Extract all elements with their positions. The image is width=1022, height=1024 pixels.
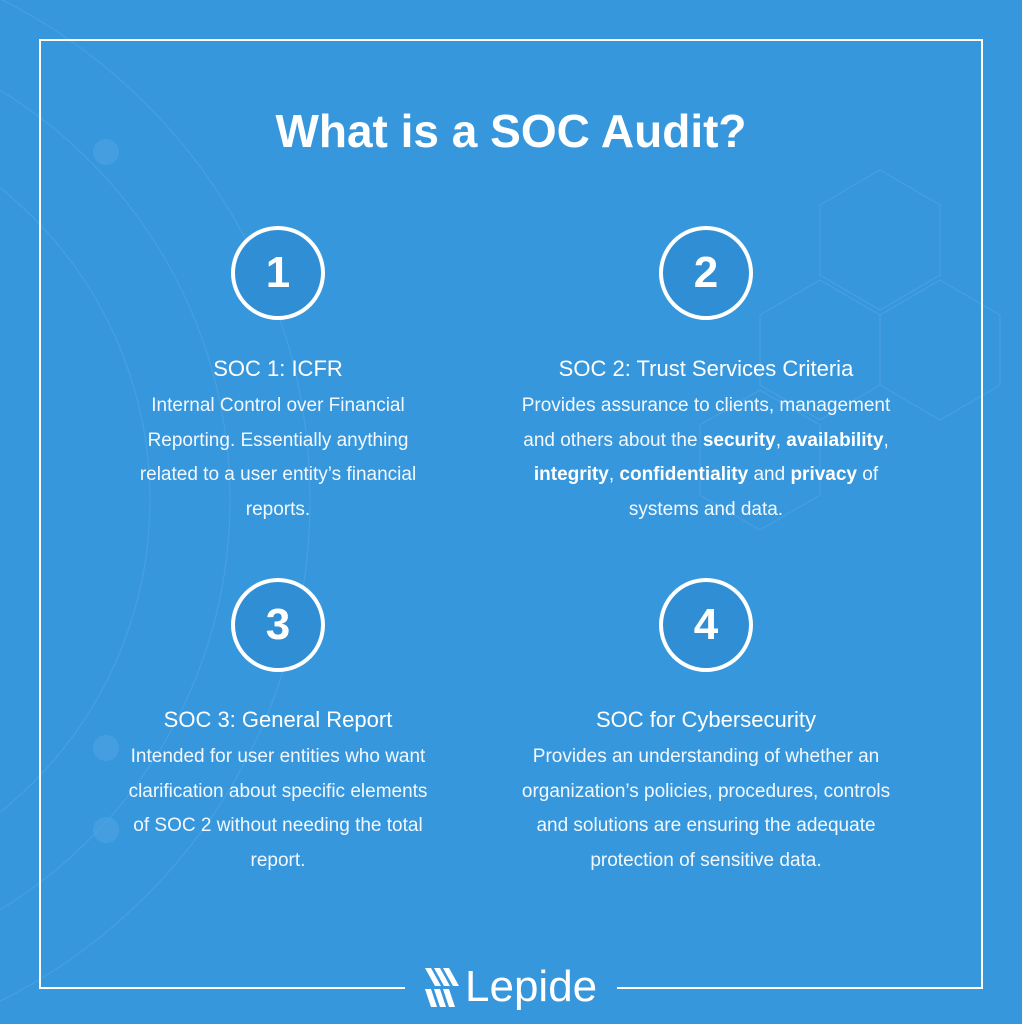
text: SOC for Cybersecurity: protection of sensitive data.: [590, 850, 822, 870]
text: SOC 3: of SOC 2 without needing the total: [133, 815, 423, 836]
text: SOC for Cybersecurity: [522, 707, 890, 870]
text: SOC 2: Provides assurance to clients, management: [522, 395, 890, 416]
text: SOC 2: SOC 2: Trust Services Criteria: [559, 356, 853, 381]
text: SOC 2: [522, 356, 890, 520]
text: SOC 3: SOC 3: General Report: [164, 707, 392, 732]
icon: number 3: 3: [266, 600, 290, 649]
text: SOC 1: Reporting. Essentially anything: [148, 430, 408, 450]
text: SOC 1: Internal Control over Financial: [151, 395, 405, 416]
text: SOC 3: Intended for user entities who want: [131, 746, 425, 767]
text: SOC for Cybersecurity: and solutions are ensuring the adequate: [536, 815, 876, 836]
icon: number 3: [231, 578, 325, 672]
text: SOC 2: and others about the security, availability,: [523, 430, 889, 450]
text: SOC for Cybersecurity: SOC for Cybersecurity: [596, 707, 816, 732]
icon: number 4: [659, 578, 753, 672]
text: SOC 1: related to a user entity’s financial: [140, 464, 416, 485]
text: SOC 3: clarification about specific elements: [129, 780, 427, 802]
text: SOC 1: [140, 356, 416, 520]
icon: number 2: [659, 226, 753, 320]
text: SOC 3: [129, 707, 427, 870]
text: SOC 2: integrity, confidentiality and privacy of: [534, 464, 878, 485]
text: SOC for Cybersecurity: Provides an understanding of whether an: [533, 746, 879, 767]
icon: number 2: 2: [694, 248, 718, 297]
text: SOC 3: report.: [251, 850, 305, 870]
logo: Lepide: Lepide: [465, 962, 597, 1011]
text: SOC 1: reports.: [246, 498, 310, 520]
text: SOC 1: SOC 1: ICFR: [213, 356, 343, 381]
title: What is a SOC Audit?: [275, 105, 747, 157]
icon: number 1: [231, 226, 325, 320]
text: SOC 2: systems and data.: [629, 498, 783, 520]
icon: number 4: 4: [694, 600, 718, 649]
text: SOC for Cybersecurity: organization’s policies, procedures, controls: [522, 780, 890, 802]
icon: number 1: 1: [266, 248, 290, 297]
